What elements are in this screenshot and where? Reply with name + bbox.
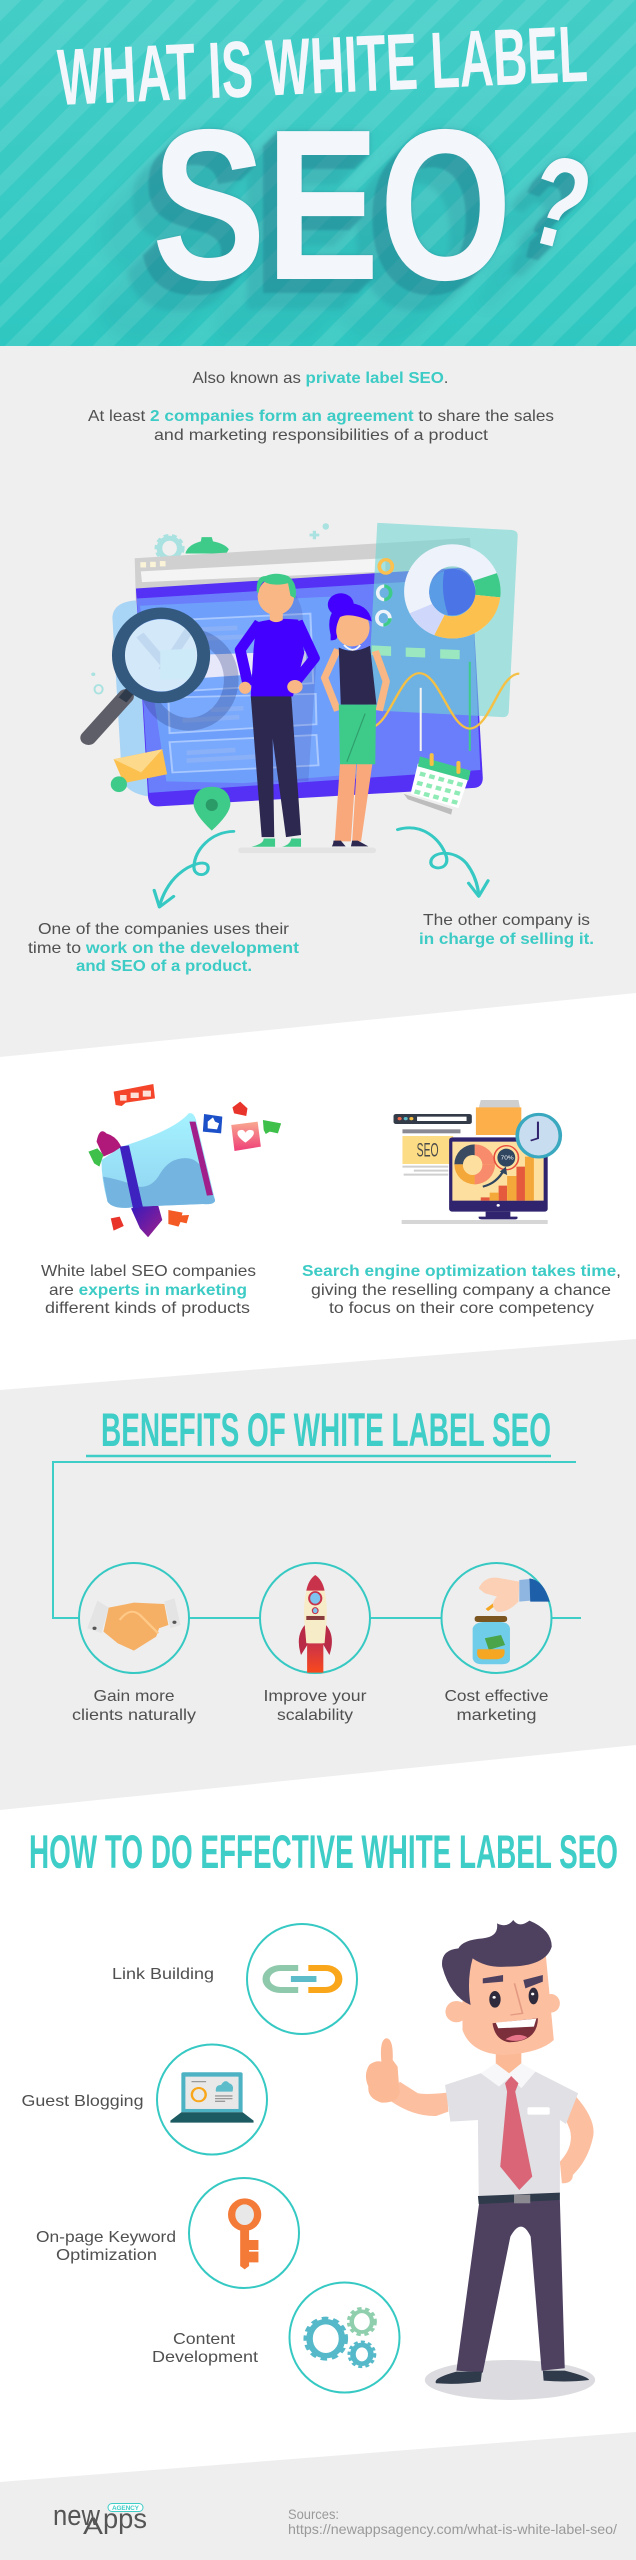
folder [476, 1100, 521, 1135]
leaves [88, 1131, 122, 1167]
panel: introduction background [0, 346, 636, 1057]
panel: light blue backing [112, 600, 162, 796]
belt [478, 2193, 560, 2204]
chart: small green tabs [372, 645, 460, 659]
social icons [111, 1084, 281, 1231]
step circles [157, 1924, 400, 2392]
icon: calendar [404, 755, 471, 815]
text: cost effective marketing [444, 1688, 549, 1724]
text: white label experts: different kinds of products [45, 1300, 250, 1317]
text: content development: Development [152, 2349, 259, 2366]
chart on monitor [454, 1144, 534, 1201]
text: intro line two and three: and marketing responsibilities of a product [154, 427, 489, 444]
text: sources [288, 2506, 617, 2537]
tie [500, 2076, 532, 2190]
decor: gears [91, 523, 329, 694]
connector: heading underline and benefit line [53, 1456, 581, 1618]
text: improve scalability: Improve your [264, 1688, 367, 1705]
legs [456, 2200, 565, 2373]
icon: coin jar [473, 1578, 550, 1664]
text: white label experts: are experts in marketing [49, 1282, 247, 1299]
man silhouette shadow [268, 596, 316, 781]
SEO panel [402, 1136, 453, 1175]
SEO panel: SEO [417, 1140, 439, 1161]
text: improve scalability: scalability [277, 1707, 353, 1724]
text: cost effective marketing: marketing [456, 1707, 536, 1724]
neck [496, 2047, 521, 2073]
benefit circles [79, 1563, 552, 1673]
text: content development: Content [173, 2331, 236, 2348]
head [442, 1920, 560, 2055]
monitor [402, 1137, 548, 1224]
text: SEO takes time: to focus on their core competency [329, 1300, 594, 1317]
text: cost effective marketing: Cost effective [444, 1688, 549, 1705]
text: gain more clients: Gain more [94, 1688, 175, 1705]
logo: newApps agency: A [83, 2513, 103, 2540]
text: first company: and SEO of a product. [76, 958, 252, 975]
text: first company: time to work on the development [28, 940, 300, 957]
text: SEO takes time: Search engine optimization takes time , [302, 1263, 621, 1280]
browser window [135, 538, 483, 806]
name badge [527, 2107, 550, 2115]
shoes [436, 2371, 589, 2384]
person: man [239, 574, 314, 847]
text: second company [419, 912, 594, 948]
arrow: to first company [154, 831, 234, 907]
handle [131, 1203, 162, 1237]
heading: SEO with long shadow: ? [514, 127, 605, 280]
text: first company [28, 921, 300, 975]
logo: newApps agency: new [53, 2500, 101, 2532]
panel: header [0, 0, 636, 346]
raised arm and hand [366, 2038, 448, 2116]
chart: small donuts [377, 560, 392, 625]
text: second company: in charge of selling it. [419, 931, 594, 948]
icon: envelope [111, 749, 167, 792]
text: on-page keyword optimization: Optimization [56, 2247, 157, 2264]
shirt [445, 2072, 578, 2197]
icon: clock [517, 1114, 560, 1157]
icon: link [266, 1968, 339, 1990]
right arm [560, 2097, 594, 2183]
text: SEO takes time: giving the reselling company a chance [311, 1282, 611, 1299]
icon: handshake [87, 1598, 181, 1651]
illustration: team with dashboard [88, 523, 519, 907]
icon: laptop [170, 2072, 254, 2123]
text: SEO takes time [302, 1263, 621, 1317]
collar [481, 2063, 536, 2088]
text: gain more clients: clients naturally [72, 1707, 196, 1724]
text: content development [152, 2331, 259, 2366]
text: white label experts: White label SEO companies [41, 1263, 256, 1280]
chart on monitor: 70% [501, 1156, 514, 1161]
illustration: businessman with thumbs up [366, 1920, 595, 2400]
text: second company: The other company is [423, 912, 590, 929]
icon: gears [305, 2308, 375, 2367]
chart: lines and wave [375, 662, 519, 751]
chart: large donut [417, 555, 488, 627]
text: white label experts [41, 1263, 256, 1317]
panel: footer [0, 2432, 636, 2560]
ground shadow [425, 2360, 595, 2400]
megaphone body [101, 1113, 215, 1209]
text: guest blogging: Guest Blogging [22, 2093, 144, 2110]
illustration: SEO takes time dashboard [394, 1100, 560, 1224]
logo: newApps agency [53, 2500, 147, 2540]
person: woman [325, 593, 386, 846]
text: intro line one: Also known as private label SEO . [192, 370, 449, 387]
text: link building: Link Building [112, 1966, 214, 1983]
logo: newApps agency: pps [103, 2503, 147, 2534]
logo: newApps agency: AGENCY [112, 2505, 140, 2512]
panel: benefits background [0, 1339, 636, 1810]
text: improve scalability [264, 1688, 367, 1724]
text: sources: https://newappsagency.com/what-is-white-label-seo/ [288, 2521, 617, 2537]
magnifier [88, 613, 231, 738]
heading: SEO with long shadow: SEO [152, 84, 512, 325]
floor shadow [238, 847, 376, 853]
browser bar [394, 1114, 472, 1133]
icon: rocket [299, 1575, 332, 1673]
text: intro line two and three: At least 2 companies form an agreement to share the sales [88, 408, 554, 425]
text: first company: One of the companies uses their [38, 921, 290, 938]
text: sources: Sources: [288, 2506, 339, 2522]
arrow: to second company [398, 828, 488, 896]
icon: key [232, 2201, 258, 2269]
icon: location pin [194, 787, 230, 831]
text: gain more clients [72, 1688, 196, 1724]
illustration: megaphone [88, 1084, 281, 1237]
text: on-page keyword optimization [36, 2229, 176, 2264]
text: intro line two and three [88, 408, 554, 444]
panel: translucent teal chart card [367, 523, 518, 717]
text: on-page keyword optimization: On-page Keyword [36, 2229, 176, 2246]
